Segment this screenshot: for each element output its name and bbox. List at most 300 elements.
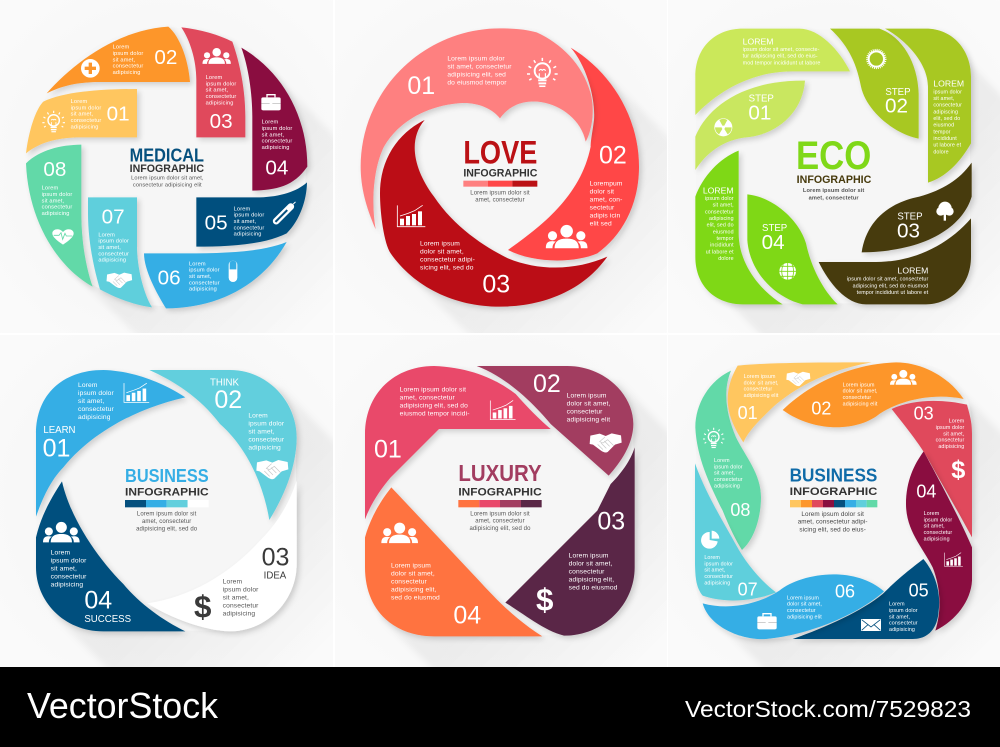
title: luxury: INFOGRAPHIC <box>458 486 542 498</box>
segment 02 think <box>149 370 297 520</box>
text 02: adipisicing elit <box>843 401 878 407</box>
text: elit, sed do <box>707 223 734 229</box>
text 02: dolor sit amet, <box>843 389 878 395</box>
segment 05 <box>793 559 939 639</box>
number and label: THINK <box>210 378 240 389</box>
text 04: Lorem <box>924 511 940 517</box>
text 02: dolor sit <box>590 188 614 195</box>
icon: handshake <box>590 433 622 453</box>
segment 04 success <box>36 481 185 631</box>
text: adipisicing <box>78 414 111 421</box>
number 05: 05 <box>205 211 228 234</box>
text 02: adipisicing <box>113 70 141 76</box>
icon: dollar: $ <box>194 589 211 624</box>
text <box>703 185 734 262</box>
text 03: dolor sit amet, <box>569 560 612 567</box>
text 01: adipisicing elit, sed <box>447 71 506 78</box>
text 03: consectetur <box>569 568 605 575</box>
block left lorem <box>695 151 783 304</box>
text 04: consectetur <box>391 579 428 586</box>
text: sit amet, <box>51 566 77 573</box>
text: sit amet, <box>933 96 954 102</box>
text: ipsum dolor sit amet, consectetur <box>847 277 928 283</box>
text: LOREM <box>898 265 928 275</box>
text 04: consectetur <box>924 530 952 536</box>
segment 01 <box>365 366 551 519</box>
text: consectetur <box>223 603 259 610</box>
number 04: 04 <box>265 157 288 180</box>
text 02: amet, con- <box>590 196 622 203</box>
title: eco <box>796 134 871 201</box>
number 06: 06 <box>835 581 855 601</box>
label: STEP <box>897 212 923 223</box>
segment 02 <box>47 27 190 93</box>
segment 08 <box>26 145 93 287</box>
text 01: sit amet, consectetur <box>447 63 512 70</box>
label <box>762 223 787 254</box>
text 08: ipsum dolor <box>42 192 72 198</box>
icon: pie chart <box>701 531 719 549</box>
segment 04 <box>906 451 972 631</box>
block top lorem <box>695 29 850 115</box>
text 02: ipsum dolor <box>113 51 143 57</box>
title: business <box>125 465 209 532</box>
number 03: 03 <box>914 404 934 424</box>
number 03: 03 <box>482 270 510 298</box>
text 02: consectetur <box>567 409 603 416</box>
text: tempor <box>716 236 734 242</box>
text: adipiscing <box>933 109 958 115</box>
text 03: dolor sit amet, <box>420 248 464 255</box>
text: consectetur <box>78 406 115 413</box>
title: business: Lorem ipsum dolor sit <box>801 511 864 518</box>
title: business: INFOGRAPHIC <box>125 486 209 498</box>
icon: people <box>202 48 231 64</box>
label: STEP <box>749 94 774 105</box>
segment 03 <box>505 447 635 636</box>
segment 04 <box>365 487 542 636</box>
text: ipsum dolor <box>51 558 87 565</box>
text 06: ipsum dolor <box>189 268 220 274</box>
title: luxury: amet, consectetur <box>475 519 525 525</box>
block bottom lorem <box>819 218 971 304</box>
text 05: sit amet, <box>889 614 910 620</box>
text 03: sit amet, <box>206 88 229 94</box>
icon: dollar: $ <box>951 456 965 484</box>
text 05: Lorem <box>889 602 905 608</box>
text 03: adipisicing elit, <box>569 576 614 583</box>
number and label <box>43 425 76 462</box>
text 01: adipisicing elit <box>744 393 779 399</box>
icon: people <box>546 225 588 248</box>
text 03: consectetur <box>936 438 964 444</box>
panel: business infographic eight steps <box>693 360 1000 667</box>
text 07: consectetur <box>704 574 733 580</box>
segment 08 <box>695 371 761 550</box>
number and label: 04 <box>84 587 112 615</box>
text 07: sit amet, <box>98 245 121 251</box>
text 05: adipisicing <box>234 232 262 238</box>
text 03: consectetur <box>206 94 236 100</box>
text 01: adipisicing elit, sed do <box>400 402 468 409</box>
panel: love infographic <box>358 26 667 333</box>
label <box>885 87 911 118</box>
segment 01 <box>361 28 593 229</box>
number 02: 02 <box>599 141 627 169</box>
text 04: Lorem <box>262 120 279 126</box>
text 08: ipsum dolor <box>714 464 743 470</box>
panel: luxury infographic <box>362 363 667 667</box>
segment 04 <box>241 48 307 191</box>
text 02: dolor sit amet, <box>567 401 610 408</box>
step 01 <box>695 81 805 170</box>
number and label: 02 <box>214 386 242 414</box>
text: Lorem <box>78 382 98 389</box>
text 06: consectetur <box>189 280 220 286</box>
number 07: 07 <box>738 580 758 600</box>
number 08: 08 <box>730 500 750 520</box>
text 03: sed do eiusmod <box>569 584 618 591</box>
text 01: Lorem ipsum dolor <box>447 55 505 62</box>
number 03: 03 <box>597 507 625 535</box>
number 07: 07 <box>102 205 125 228</box>
text: tempor incididunt ut labore et <box>857 290 929 296</box>
text: dolore <box>718 256 734 262</box>
text 04: consectetur <box>262 139 292 145</box>
footer url: VectorStock.com/7529823 <box>685 696 971 722</box>
label: 01 <box>748 101 771 124</box>
text: ipsum dolor <box>248 420 285 427</box>
segment 07 <box>88 197 152 307</box>
number 02: 02 <box>154 46 177 69</box>
text: adipiscing <box>709 216 734 222</box>
text 04: sed do eiusmod <box>391 595 440 602</box>
text 08: adipisicing <box>42 211 70 217</box>
text 07: ipsum dolor <box>98 239 129 245</box>
title: luxury: LUXURY <box>458 460 542 486</box>
text: LOREM <box>703 185 734 195</box>
number 02: 02 <box>533 370 561 398</box>
number and label <box>84 587 131 625</box>
text 08: consectetur <box>42 205 72 211</box>
text 01: adipisicing <box>71 124 99 130</box>
text 01: Lorem ipsum <box>744 374 776 380</box>
title: eco: amet, consectetur <box>809 195 859 201</box>
text 02: adipisicing elit <box>567 417 610 424</box>
panel: eco infographic <box>693 26 1000 333</box>
title: medical: MEDICAL <box>130 145 204 166</box>
text 05: adipisicing <box>889 627 915 633</box>
number and label: 03 <box>262 543 289 571</box>
text: adipisicing <box>248 444 281 451</box>
segment 03 <box>892 401 972 537</box>
text 07: sit amet, <box>704 568 725 574</box>
number 03: 03 <box>210 110 233 133</box>
icon: capsule <box>229 261 237 282</box>
text: sit amet, <box>713 203 734 209</box>
segment 06 <box>703 574 884 639</box>
footer bar <box>0 667 1000 747</box>
number and label: LEARN <box>43 425 76 436</box>
text: adipisicing <box>51 582 83 589</box>
icon: briefcase <box>261 95 281 110</box>
text 08: Lorem <box>714 458 730 464</box>
text 02: elit sed <box>590 220 612 227</box>
text 01: do eiusmod tempor <box>447 79 507 86</box>
icon: bulb <box>527 58 558 87</box>
text 07: adipisicing <box>704 580 730 586</box>
title: business: amet, consectetur <box>142 519 191 525</box>
text 01: Lorem <box>71 99 88 105</box>
title: medical: Lorem ipsum dolor sit amet, <box>131 176 204 182</box>
text: consectetur <box>248 436 285 443</box>
text 03: ipsum dolor <box>206 81 236 87</box>
icon: handshake <box>786 372 810 386</box>
title: eco: Lorem ipsum dolor sit <box>803 188 864 194</box>
segment 01 <box>728 362 872 442</box>
text 02: consectetur <box>113 64 143 70</box>
text 05: consectetur <box>234 225 264 231</box>
icon: chart <box>490 400 516 420</box>
text 03: adipisicing <box>206 100 234 106</box>
text 01: dolor sit amet, <box>744 380 779 386</box>
text 03: consectetur adipi- <box>420 256 475 263</box>
title: love <box>463 134 537 203</box>
text 02: adipis icin <box>590 212 621 219</box>
text 05: ipsum dolor <box>889 608 918 614</box>
segment 02 <box>477 366 633 476</box>
text 05: ipsum dolor <box>234 213 264 219</box>
icon: globe <box>779 263 796 280</box>
icon: handshake <box>107 273 132 288</box>
text 04: sit amet, <box>924 524 945 530</box>
text 03: Lorem <box>949 419 965 425</box>
text 04: dolor sit amet, <box>391 571 435 578</box>
title: business: sicing elit, sed do eius- <box>799 526 866 533</box>
text 06: adipisicing elit <box>787 614 822 620</box>
block right lorem <box>885 29 971 183</box>
text 04: adipisicing <box>262 145 290 151</box>
text: adipiscing elit, sed do eiusmod <box>853 283 928 289</box>
text: tempor <box>933 129 951 135</box>
text 03: Lorem ipsum <box>569 552 609 559</box>
segment 03 idea <box>147 481 297 631</box>
panel: medical infographic <box>24 24 333 333</box>
text: ipsum dolor <box>933 89 962 95</box>
title: love: amet, consectetur <box>475 197 525 203</box>
icon: chart <box>124 383 149 402</box>
icon: heart <box>52 229 74 245</box>
icon: bulb <box>42 111 65 132</box>
text: mod tempor incididunt ut labore <box>743 60 820 66</box>
number 06: 06 <box>158 266 181 289</box>
text: ipsum dolor <box>705 196 734 202</box>
title: business: adipisicing elit, sed do <box>136 526 198 532</box>
text 05: Lorem <box>234 206 251 212</box>
text 02: Lorem <box>113 45 130 51</box>
text: Lorem <box>248 412 268 419</box>
icon: bulb <box>703 428 724 448</box>
number 01: 01 <box>374 435 402 463</box>
number 02: 02 <box>811 399 831 419</box>
text 06: adipisicing <box>189 287 217 293</box>
icon: dollar: $ <box>536 583 553 618</box>
title: luxury <box>458 460 542 532</box>
text 07: Lorem <box>704 555 720 561</box>
text: incididunt <box>710 243 734 249</box>
title: medical <box>130 145 204 189</box>
title: business: BUSINESS <box>790 464 877 485</box>
text 05: consectetur <box>889 621 918 627</box>
text: LOREM <box>933 78 964 88</box>
icon: tree <box>936 202 954 221</box>
text 01: amet, consectetur <box>400 394 455 401</box>
text 02: sectetur <box>590 204 615 211</box>
title: medical: INFOGRAPHIC <box>130 163 204 175</box>
icon: people <box>43 522 80 542</box>
text 01: Lorem ipsum dolor sit <box>400 386 466 393</box>
step 02 <box>830 29 919 139</box>
text 04: adipisicing <box>924 536 950 542</box>
title: business <box>790 464 877 533</box>
text 04: ipsum dolor <box>262 126 292 132</box>
number 01: 01 <box>738 403 758 423</box>
text: eiusmod <box>713 229 734 235</box>
text 08: sit amet, <box>714 471 735 477</box>
text: ipsum dolor sit amet, consecte- <box>743 47 820 53</box>
text: consectetur <box>933 103 962 109</box>
segment 05 <box>196 182 307 247</box>
text: consectetur <box>51 574 87 581</box>
text 07: adipisicing <box>98 258 126 264</box>
text 08: sit amet, <box>42 198 65 204</box>
title: eco: INFOGRAPHIC <box>797 174 871 186</box>
label: STEP <box>885 87 911 98</box>
segment 07 <box>695 463 776 600</box>
text 08: Lorem <box>42 186 59 192</box>
title: love: INFOGRAPHIC <box>463 168 537 180</box>
number 04: 04 <box>916 481 936 501</box>
text 04: adipisicing elit, <box>391 587 437 594</box>
text 01: consectetur <box>744 387 772 393</box>
icon: people <box>381 523 418 543</box>
label <box>748 94 774 124</box>
text 02: Lorem ipsum <box>843 382 875 388</box>
text: ut labore et <box>933 143 962 149</box>
title: medical: consectetur adipisicing elit <box>133 183 202 189</box>
footer logo: VectorStock <box>27 685 219 726</box>
text: Lorem <box>223 579 243 586</box>
text 02: Lorempum <box>590 180 623 187</box>
step 04 <box>747 194 838 304</box>
segment 03 <box>380 120 607 307</box>
number 01: 01 <box>407 72 435 100</box>
title: business: Lorem ipsum dolor sit <box>137 512 197 518</box>
number and label: 01 <box>43 434 70 462</box>
text: sit amet, <box>78 398 104 405</box>
icon: handshake <box>256 460 288 479</box>
text 07: ipsum dolor <box>704 561 733 567</box>
text <box>847 265 929 296</box>
text 03: Lorem ipsum <box>420 240 460 247</box>
segment 03 <box>181 27 245 137</box>
number 05: 05 <box>909 581 929 601</box>
segment 01 <box>26 89 137 153</box>
text: ut labore et <box>706 249 734 255</box>
text 03: ipsum dolor <box>936 425 964 431</box>
text 01: consectetur <box>71 118 101 124</box>
number 01: 01 <box>107 103 130 126</box>
icon: thermometer <box>271 199 298 226</box>
text 04: ipsum dolor <box>924 517 952 523</box>
text: incididunt <box>933 136 957 142</box>
text 07: consectetur <box>98 251 129 257</box>
label: 04 <box>762 231 785 254</box>
label: 03 <box>897 219 920 242</box>
icon: briefcase <box>757 614 777 629</box>
text 01: eiusmod tempor incidi- <box>400 410 470 417</box>
segment 02 <box>783 362 964 427</box>
text 02: Lorem ipsum <box>567 393 607 400</box>
title: business: BUSINESS <box>125 465 209 486</box>
icon: radiation <box>714 118 732 136</box>
text: consectetur <box>705 209 734 215</box>
text 03: sit amet, <box>943 431 964 437</box>
segment 02 <box>508 48 639 260</box>
title: business: INFOGRAPHIC <box>790 486 877 498</box>
text 07: Lorem <box>98 232 115 238</box>
text: sit amet, <box>248 428 275 435</box>
number 04: 04 <box>453 602 481 630</box>
text: LOREM <box>743 36 773 46</box>
icon: chart <box>945 553 963 566</box>
text: ipsum dolor <box>223 587 259 594</box>
text 03: Lorem <box>206 75 223 81</box>
title: eco: ECO <box>796 134 871 178</box>
label: STEP <box>762 223 787 234</box>
title: love: Lorem ipsum dolor sit <box>470 191 530 197</box>
text 08: consectetur <box>714 477 743 483</box>
text <box>743 36 820 66</box>
text 05: sit amet, <box>234 219 257 225</box>
label: 02 <box>885 95 908 118</box>
text 04: Lorem ipsum <box>391 563 431 570</box>
text 06: dolor sit amet, <box>787 602 822 608</box>
step 03 <box>862 163 972 252</box>
segment 06 <box>144 242 287 308</box>
text 03: adipisicing <box>938 444 964 450</box>
text 06: sit amet, <box>189 274 212 280</box>
text: elit, sed do <box>933 116 960 122</box>
panel: business infographic four steps <box>33 367 333 667</box>
segment 01 learn <box>36 370 185 517</box>
icon: chart <box>397 205 425 227</box>
number 08: 08 <box>43 158 66 181</box>
label <box>897 212 923 242</box>
text: sit amet, <box>223 595 249 602</box>
text 02: sit amet, <box>113 57 136 63</box>
icon: sun <box>867 50 886 68</box>
text: adipisicing <box>223 611 255 618</box>
title: business: amet, consectetur adipi- <box>798 519 868 526</box>
text: eiusmod <box>933 123 954 129</box>
text: dolore <box>933 149 949 155</box>
number and label: SUCCESS <box>84 614 131 625</box>
text: tur adipiscing elit, sed do eius- <box>743 54 818 60</box>
number and label: IDEA <box>264 570 287 581</box>
title: luxury: Lorem ipsum dolor sit <box>470 511 530 517</box>
text 06: Lorem <box>189 261 206 267</box>
